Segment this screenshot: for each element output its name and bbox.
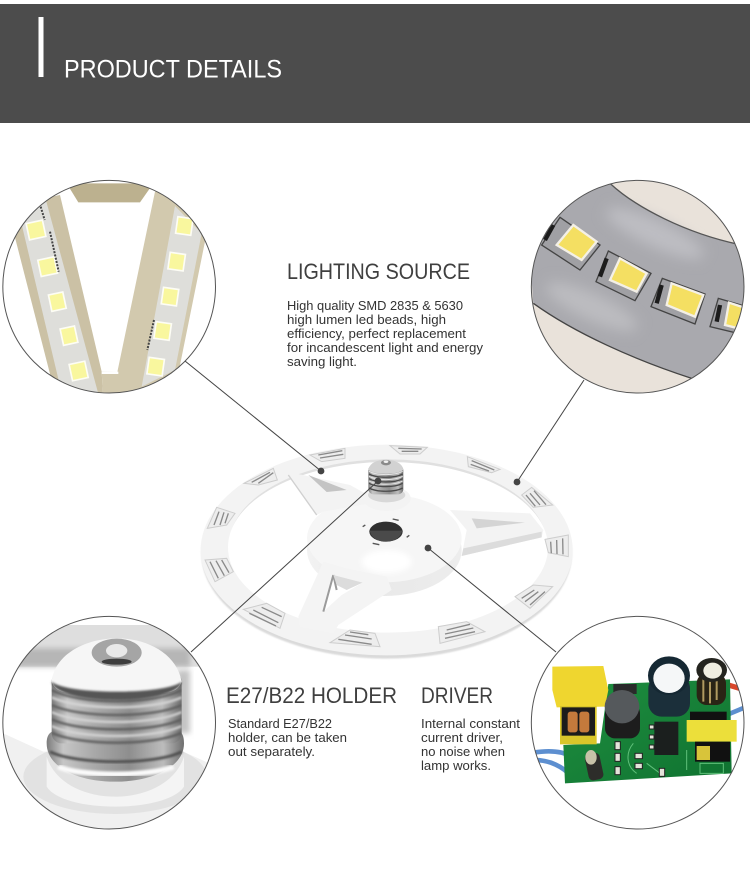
description: driver: current driver, <box>421 731 503 745</box>
bead lenses <box>557 225 750 330</box>
leader line: LED strip <box>185 361 324 474</box>
bead frames <box>542 217 750 337</box>
leader line: holder <box>191 478 381 652</box>
heading: holder: E27/B22 HOLDER <box>226 683 397 708</box>
hub <box>307 494 462 596</box>
E27 holder on lamp <box>363 459 411 511</box>
SMD parts <box>615 725 665 776</box>
heading: driver: DRIVER <box>421 683 493 708</box>
header accent bar <box>38 17 44 77</box>
description: lighting source: high lumen led beads, high <box>287 313 446 327</box>
LEDs right <box>147 217 193 376</box>
inductor <box>605 709 640 738</box>
product: ring lamp <box>201 445 573 659</box>
leader line: SMD beads <box>514 380 584 485</box>
description: driver <box>421 717 521 773</box>
description: lighting source <box>287 299 484 369</box>
inset: SMD beads close-up <box>530 180 744 394</box>
LEDs left <box>26 220 88 381</box>
description: holder: out separately. <box>228 745 315 759</box>
header band <box>0 4 750 123</box>
text block: lighting source <box>287 259 484 369</box>
inset: LED strip close-up <box>0 177 220 400</box>
ring vents <box>205 446 568 647</box>
spokes <box>287 472 543 633</box>
description: driver: no noise when <box>421 745 505 759</box>
description: lighting source: for incandescent light and energy <box>287 341 484 355</box>
electrolytic capacitor small <box>697 673 726 705</box>
ring <box>201 445 573 659</box>
wires <box>536 749 565 773</box>
description: holder <box>228 717 347 759</box>
text block: holder <box>226 683 397 759</box>
dome <box>52 638 182 694</box>
screw threads <box>52 690 182 743</box>
title: PRODUCT DETAILS <box>64 56 282 84</box>
leader line: driver <box>425 545 556 652</box>
description: holder: Standard E27/B22 <box>228 717 332 731</box>
heading: lighting source: LIGHTING SOURCE <box>287 259 470 284</box>
IC chip <box>654 722 678 755</box>
PCB <box>563 679 732 783</box>
description: driver: lamp works. <box>421 759 491 773</box>
description: lighting source: High quality SMD 2835 & 5630 <box>287 299 463 313</box>
fuse <box>584 753 604 780</box>
description: holder: holder, can be taken <box>228 731 347 745</box>
description: driver: Internal constant <box>421 717 521 731</box>
description: lighting source: saving light. <box>287 355 357 369</box>
description: lighting source: efficiency, perfect replacement <box>287 327 467 341</box>
electrolytic capacitor large <box>648 682 690 717</box>
text block: driver <box>421 683 521 773</box>
common mode choke <box>560 706 597 744</box>
inset: E27 holder close-up <box>0 613 220 837</box>
transformer <box>690 712 727 720</box>
inset: driver board close-up <box>527 613 750 833</box>
X capacitor <box>552 666 608 707</box>
